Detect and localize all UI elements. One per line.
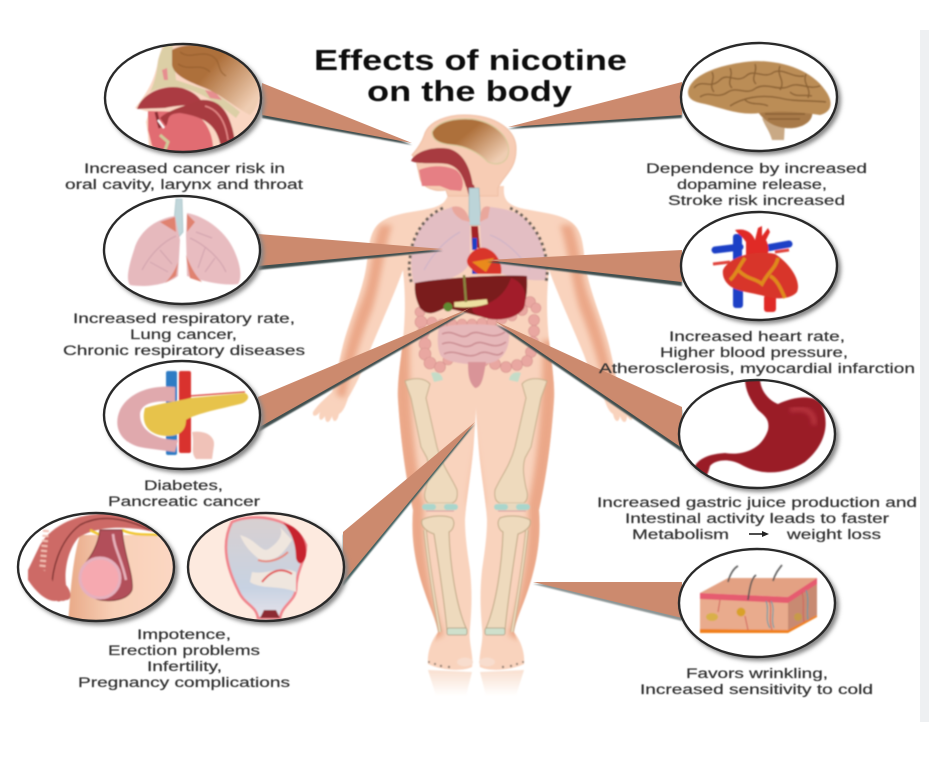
callout: reproductive bbox=[343, 422, 475, 586]
large intestine bbox=[415, 296, 541, 372]
text: reproductive effects: Infertility, bbox=[147, 659, 222, 674]
mouth and throat bbox=[419, 166, 463, 191]
foot reflections bbox=[428, 670, 524, 696]
epidermis layer bbox=[700, 578, 817, 603]
head brain bbox=[432, 119, 509, 164]
nasal cavity bbox=[411, 148, 473, 187]
vessels bbox=[766, 590, 808, 628]
text: reproductive effects: Impotence, bbox=[137, 627, 231, 642]
text: stomach: Intestinal activity leads to faster bbox=[625, 511, 890, 526]
text: skin bbox=[640, 666, 873, 697]
text: brain bbox=[646, 161, 867, 208]
text: brain: Dependence by increased bbox=[646, 161, 867, 176]
sidebar strip bbox=[920, 30, 929, 722]
panel: uterus and pregnancy bbox=[188, 513, 348, 625]
text: stomach: weight loss bbox=[786, 527, 881, 542]
skin side face bbox=[788, 578, 817, 632]
text: reproductive effects bbox=[78, 627, 290, 690]
heart bbox=[467, 226, 501, 274]
text: stomach bbox=[597, 495, 917, 542]
duodenum bbox=[117, 387, 178, 452]
text: stomach: Metabolism bbox=[632, 527, 729, 542]
blue vein bbox=[166, 371, 177, 455]
title bbox=[314, 45, 627, 108]
panel: brain bbox=[681, 43, 841, 155]
callout: stomach bbox=[495, 321, 682, 452]
isolated right lung bbox=[186, 213, 240, 285]
isolated left lung bbox=[128, 216, 180, 286]
human body figure bbox=[313, 115, 639, 696]
panel: stomach bbox=[679, 378, 839, 492]
text: reproductive effects: Pregnancy complications bbox=[78, 675, 290, 690]
title: Effects of nicotine bbox=[314, 45, 627, 77]
body left half bbox=[313, 186, 478, 670]
text: mouth and throat: oral cavity, larynx and throat bbox=[65, 177, 303, 192]
trachea bbox=[469, 188, 481, 225]
heart body bbox=[723, 253, 798, 298]
red artery bbox=[179, 371, 191, 453]
lower vessel bbox=[764, 295, 776, 312]
text: stomach: Increased gastric juice production and bbox=[597, 495, 917, 510]
callout: lungs bbox=[258, 234, 443, 270]
pharynx section bbox=[160, 99, 235, 144]
text: mouth and throat bbox=[65, 161, 303, 192]
skin top face bbox=[700, 578, 817, 597]
pelvis bones bbox=[431, 372, 521, 382]
fetal folds bbox=[240, 525, 296, 592]
head bbox=[412, 115, 516, 196]
text: skin: Increased sensitivity to cold bbox=[640, 682, 873, 697]
text: reproductive effects: Erection problems bbox=[108, 643, 260, 658]
text: mouth and throat: Increased cancer risk in bbox=[84, 161, 285, 176]
panel: skin bbox=[679, 549, 839, 661]
head section skin bbox=[135, 45, 260, 147]
pancreas gland bbox=[144, 393, 248, 436]
text: brain: dopamine release, bbox=[677, 177, 827, 192]
pelvic skin bbox=[68, 535, 180, 625]
callout: skin bbox=[533, 582, 682, 621]
scrotum bbox=[81, 530, 132, 601]
lung accents bbox=[160, 214, 202, 283]
urethral structure bbox=[28, 514, 165, 601]
title: on the body bbox=[367, 76, 572, 108]
aorta bbox=[735, 226, 770, 260]
text: pancreas: Pancreatic cancer bbox=[108, 494, 261, 509]
text: pancreas bbox=[108, 478, 261, 509]
skin front face bbox=[700, 593, 788, 632]
text: heart bbox=[599, 329, 915, 376]
uterus bbox=[226, 517, 306, 618]
testis bbox=[80, 558, 120, 598]
tongue section bbox=[148, 111, 213, 152]
isolated trachea bbox=[173, 199, 183, 238]
callout: heart bbox=[487, 250, 682, 286]
liver bbox=[415, 275, 527, 318]
body right half bbox=[474, 186, 639, 670]
callout: pancreas bbox=[258, 308, 470, 432]
text: skin: Favors wrinkling, bbox=[686, 666, 828, 681]
vena cava bbox=[733, 234, 742, 304]
text: heart: Increased heart rate, bbox=[669, 329, 845, 344]
panel: lungs bbox=[104, 196, 264, 308]
text: lungs: Lung cancer, bbox=[130, 327, 237, 342]
coronary fat bbox=[730, 258, 785, 298]
rib edge bbox=[409, 208, 547, 284]
glands bbox=[736, 608, 746, 616]
cerebellum bbox=[758, 110, 812, 128]
stomach organ bbox=[694, 378, 826, 478]
callout: brain bbox=[508, 82, 682, 129]
brain stem bbox=[762, 118, 785, 140]
skull layer bbox=[150, 40, 240, 118]
panel: male reproductive bbox=[18, 513, 180, 625]
arrow: metabolism to weight loss bbox=[749, 531, 769, 537]
cerebrum bbox=[688, 61, 831, 115]
text: lungs: Increased respiratory rate, bbox=[73, 311, 295, 326]
lungs bbox=[411, 206, 546, 284]
gyri bbox=[694, 64, 826, 119]
panel: heart bbox=[681, 212, 841, 324]
text: heart: Higher blood pressure, bbox=[660, 345, 848, 360]
hairs bbox=[728, 565, 782, 600]
text: pancreas: Diabetes, bbox=[144, 478, 223, 493]
fat layer bbox=[90, 530, 158, 535]
panel: mouth and throat bbox=[105, 38, 270, 160]
text: brain: Stroke risk increased bbox=[668, 193, 845, 208]
lower blue vessel bbox=[733, 283, 743, 308]
nasal cavity section bbox=[137, 87, 205, 109]
text: lungs bbox=[63, 311, 305, 358]
callout: mouth and throat bbox=[262, 83, 412, 145]
stomach bbox=[472, 278, 525, 320]
text: lungs: Chronic respiratory diseases bbox=[63, 343, 305, 358]
section brain bbox=[172, 45, 259, 115]
rectum bbox=[468, 362, 486, 388]
small intestine bbox=[438, 324, 509, 364]
placenta bbox=[283, 523, 306, 563]
gallbladder and pancreas bbox=[444, 275, 488, 312]
text: heart: Atherosclerosis, myocardial infarction bbox=[599, 361, 915, 376]
fat layer bbox=[700, 615, 817, 633]
panel: pancreas bbox=[104, 361, 264, 473]
